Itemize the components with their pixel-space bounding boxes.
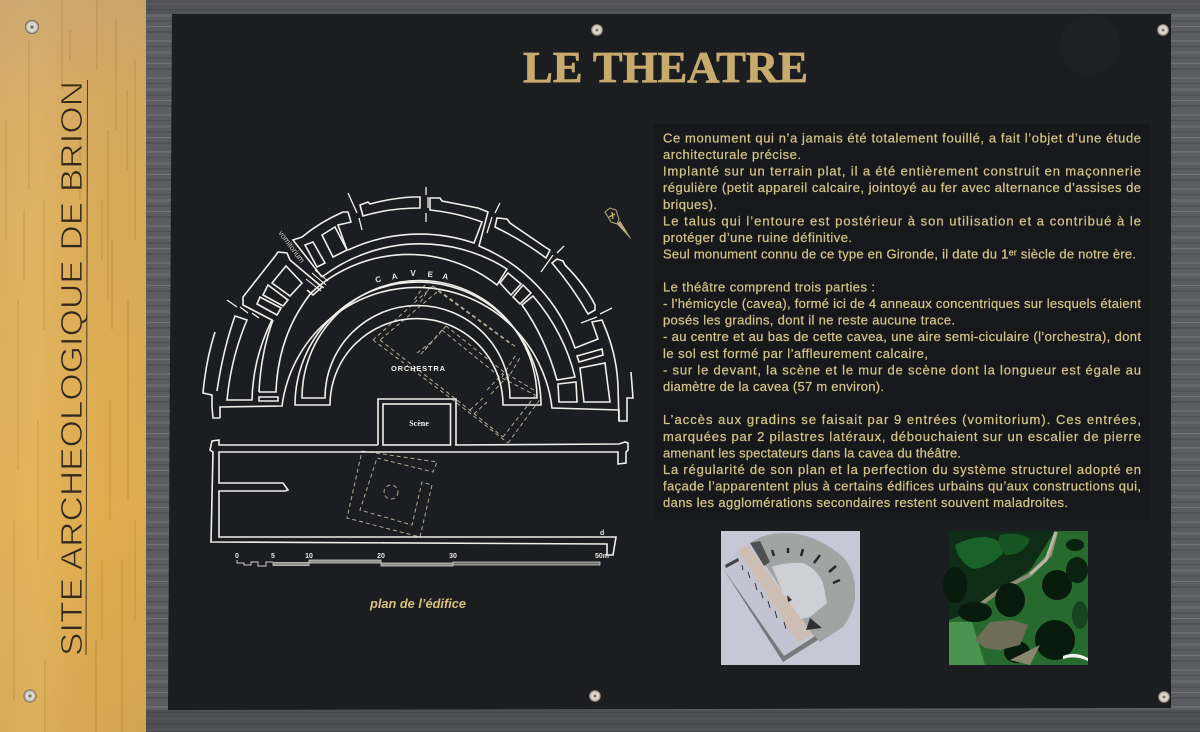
left inner compartment <box>259 293 311 392</box>
chart: scale bar: 0 <box>235 553 239 560</box>
icon: north arrow <box>605 208 631 239</box>
text block: description: dans les agglomérations secondaires restent souvent maladroites. <box>663 495 1068 510</box>
site name underline <box>86 80 88 655</box>
inner cavea ring inner <box>302 280 537 398</box>
text block: description: régulière (petit appareil calcaire, jointoyé au fer avec alternance d’assises de <box>663 180 1141 195</box>
label: cavea <box>374 269 449 285</box>
left outer compartment <box>217 252 322 400</box>
slab left <box>259 397 278 401</box>
icon: screw top right <box>1157 24 1169 36</box>
label: vomitorium: vomitorium <box>276 229 307 265</box>
text block: description: siècle de notre ère. <box>1017 246 1136 262</box>
text block: description: façade l’apparentent plus à certains édifices urbains qu’aux constructions qui, <box>663 478 1141 494</box>
icon: wood screw top <box>25 20 39 34</box>
left boxes <box>257 227 347 315</box>
rear building <box>210 440 628 555</box>
panel: black board <box>168 14 1171 710</box>
label: scene: Scène <box>409 419 429 428</box>
image: aerial view of the site <box>943 531 1088 665</box>
stage block <box>378 399 456 445</box>
inner cavea ring outer <box>295 282 541 405</box>
text block: description: posés les gradins, dont il ne reste aucune trace. <box>663 312 955 328</box>
label: cavea: A <box>442 272 449 282</box>
text block: description: er <box>1009 248 1017 258</box>
icon: wood screw bottom <box>24 690 36 702</box>
label: cavea: E <box>427 270 434 279</box>
text block: description: - sur le devant, la scène et le mur de scène dont la longueur est égale au <box>663 362 1141 378</box>
right upper segments <box>495 218 550 258</box>
text block: description: - l’hémicycle (cavea), formé ici de 4 anneaux concentriques sur lesquels étaient <box>663 296 1141 311</box>
label: cavea: A <box>391 272 398 281</box>
label: cavea: C <box>374 274 383 285</box>
title: LE THEATRE <box>523 43 808 92</box>
text block: description: L’accès aux gradins se faisait par 9 entrées (vomitorium). Ces entrées, <box>663 412 1141 427</box>
text block: description: briques). <box>663 197 717 212</box>
stairs <box>306 270 328 291</box>
image: 3D reconstruction of the theatre <box>721 531 860 665</box>
text block: description: Implanté sur un terrain plat, il a été entièrement construit en maçonnerie <box>663 164 1141 178</box>
wall ticks <box>227 187 612 323</box>
icon: screw bottom right <box>1158 691 1170 703</box>
upper arcs <box>311 244 507 293</box>
top segment <box>360 197 420 216</box>
icon: screw top centre <box>591 24 603 36</box>
chart: scale bar: 5 <box>271 553 275 560</box>
text block: description: amenant les spectateurs dans la cavea du théâtre. <box>663 446 961 460</box>
text block: description: diamètre de la cavea (57 m environ). <box>663 379 884 394</box>
chart: scale bar: 30 <box>449 553 457 560</box>
text block: description: architecturale précise. <box>663 147 801 162</box>
chart: scale bar: 10 <box>305 553 313 560</box>
vertical site name: SITE ARCHEOLOGIQUE DE BRION <box>54 81 89 656</box>
dashed foundations <box>347 285 541 537</box>
upper left wall <box>293 212 351 277</box>
icon: screw bottom centre <box>589 690 601 702</box>
chart: theatre floor plan <box>203 187 633 555</box>
text block: description: Seul monument connu de ce type en Gironde, il date du 1 <box>663 246 1008 262</box>
panel: wood side strip <box>0 0 146 732</box>
text block: description: marquées par 2 pilastres latéraux, débouchaient sur un escalier de pierre <box>663 429 1141 444</box>
label: orchestra: ORCHESTRA <box>391 364 446 373</box>
text block: description <box>663 130 1141 510</box>
text block: description: le sol est formé par l’affleurement calcaire, <box>663 346 928 361</box>
text block: description: Le talus qui l’entoure est postérieur à son utilisation et a contribué à le <box>663 214 1141 228</box>
caption: plan de l'édifice: plan de l’édifice <box>369 597 466 611</box>
text block: description: - au centre et au bas de cette cavea, une aire semi-ciculaire (l’orchestra), dont <box>663 329 1141 344</box>
chart: scale bar <box>235 553 609 566</box>
outer wall and stage wall line <box>220 287 633 421</box>
text block: description: Le théâtre comprend trois parties : <box>663 280 875 294</box>
text block: description: La régularité de son plan et la perfection du système structurel adopté en <box>663 462 1141 477</box>
panel: text background <box>654 124 1150 520</box>
chart: scale bar: 20 <box>377 553 385 560</box>
text block: description: Ce monument qui n’a jamais été totalement fouillé, a fait l’objet d’une étude <box>663 130 1141 146</box>
label: d: d <box>600 530 604 537</box>
text block: description: protéger d’une ruine définitive. <box>663 230 852 245</box>
right boxes <box>500 273 531 304</box>
chart: scale bar: 50m <box>595 553 609 560</box>
label: cavea: V <box>410 269 416 278</box>
